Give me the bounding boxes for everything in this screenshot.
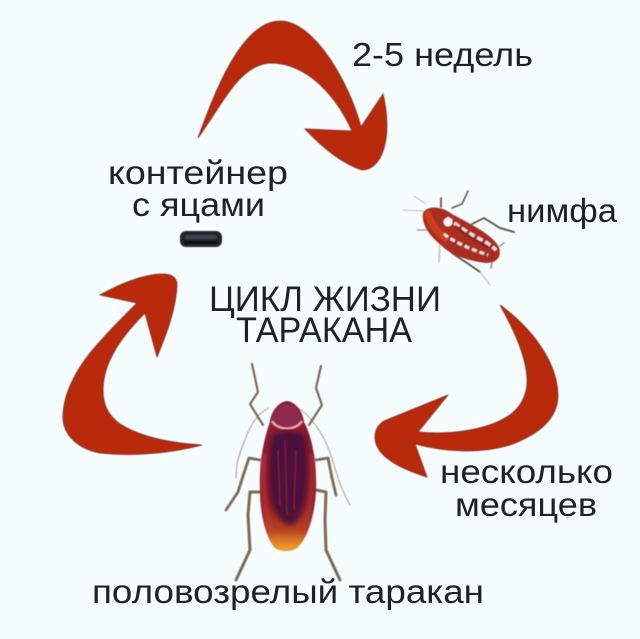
label: several months: несколько	[440, 453, 613, 490]
title: cockroach life cycle: ЦИКЛ ЖИЗНИ	[209, 280, 441, 319]
adult legs	[226, 364, 340, 580]
arrow: container to nymph	[198, 21, 387, 170]
title: cockroach life cycle: ТАРАКАНА	[236, 311, 413, 350]
adult wing shading	[269, 432, 308, 525]
arrow: adult to container	[63, 274, 202, 454]
label: several months: месяцев	[455, 486, 597, 523]
icon: nymph cockroach	[403, 191, 514, 285]
label: mature cockroach: половозрелый таракан	[92, 573, 484, 610]
label: egg container: контейнер	[108, 154, 288, 191]
arrow: nymph to adult	[375, 305, 558, 477]
nymph legs and antennae	[403, 191, 514, 285]
label: nymph: нимфа	[507, 192, 618, 229]
label: several months	[440, 453, 613, 523]
icon: adult cockroach	[226, 364, 350, 580]
nymph body	[423, 207, 500, 263]
label: 2-5 weeks: 2-5 недель	[352, 36, 533, 73]
label: egg container: с яцами	[132, 186, 265, 223]
title: cockroach life cycle	[209, 280, 441, 350]
adult body	[260, 401, 316, 551]
adult antennae	[236, 408, 350, 505]
label: egg container	[108, 154, 288, 223]
icon: egg capsule	[180, 231, 222, 247]
adult pronotum	[270, 404, 303, 430]
